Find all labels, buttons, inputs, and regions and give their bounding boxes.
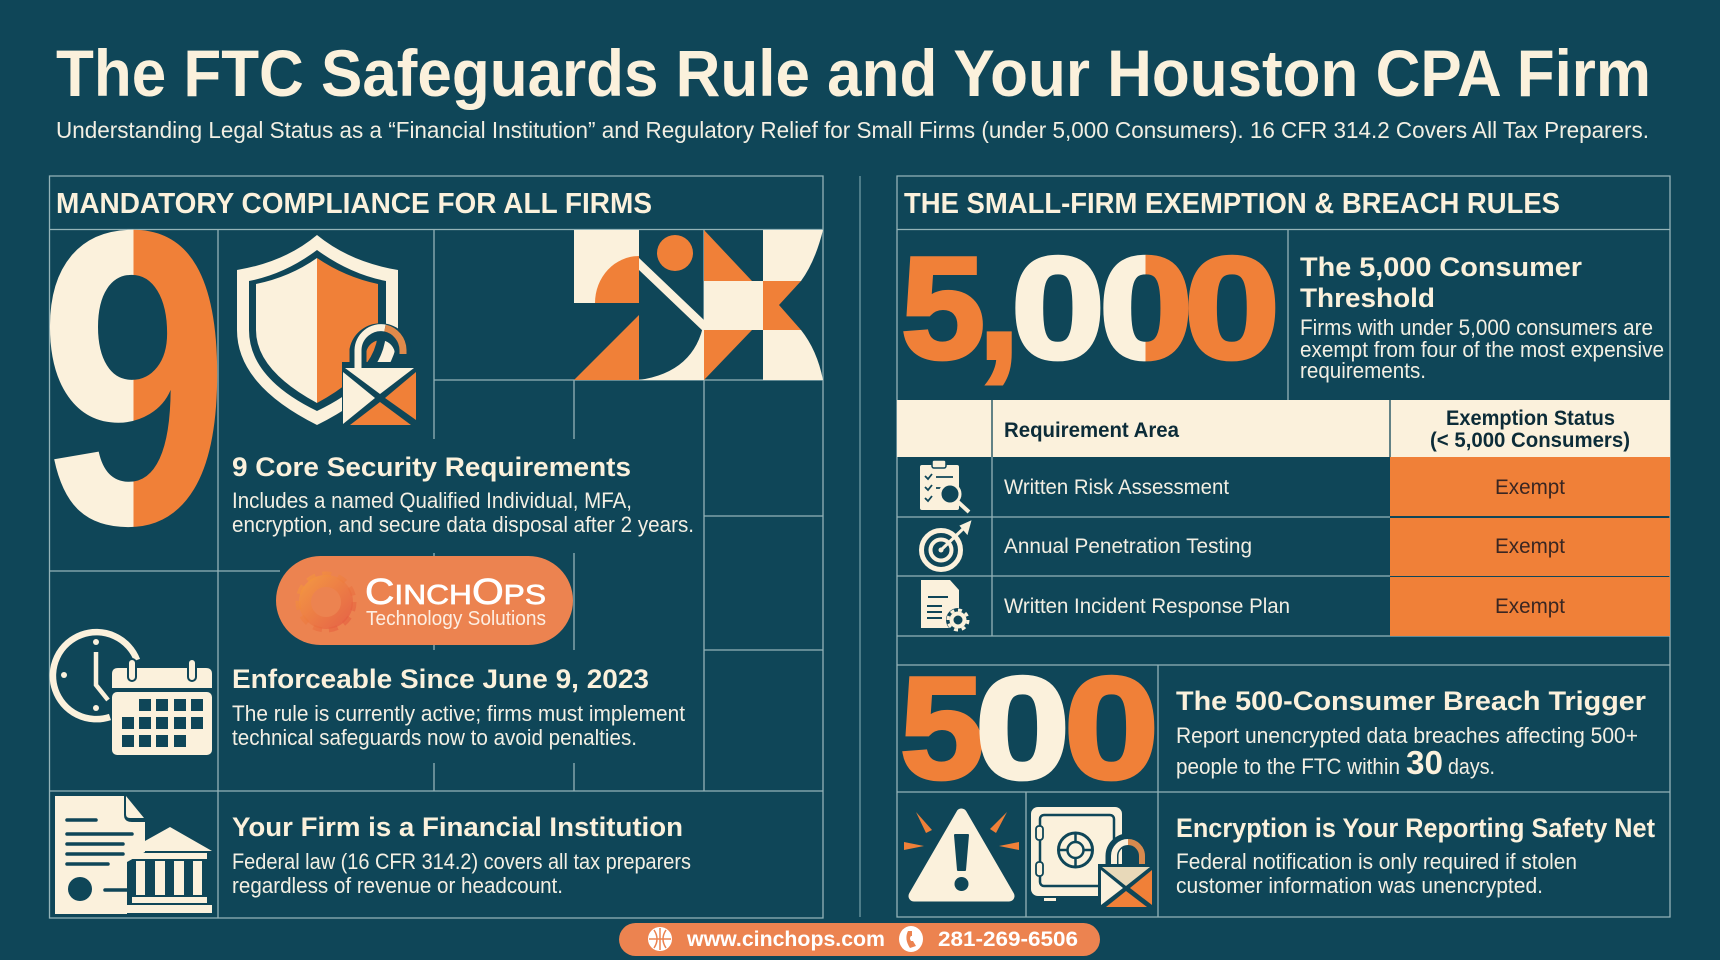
financial institution: regardless of revenue or headcount. [232,873,563,898]
enforceable since: Enforceable Since June 9, 2023 [232,664,649,694]
encryption safety net: Encryption is Your Reporting Safety Net [1176,813,1655,843]
footer contact pill [619,923,1100,956]
decorative geometric pattern [574,230,823,380]
subtitle: Understanding Legal Status as a “Financial Institution” and Regulatory Relief for Small Firms (under 5,000 Consumers). 16 CFR 314.2 Covers All Tax Preparers. [56,117,1649,143]
big number 5,000 [901,209,1280,393]
encryption safety net: customer information was unencrypted. [1176,873,1543,898]
panel: mandatory compliance [38,144,823,914]
table header: (< 5,000 Consumers) [1430,429,1630,452]
9 core security requirements: 9 Core Security Requirements [232,452,631,482]
500-consumer breach trigger: people to the FTC within [1176,754,1400,779]
5,000 consumer threshold text: Firms with under 5,000 consumers are [1300,315,1653,340]
financial institution: Your Firm is a Financial Institution [232,812,683,842]
9 core security requirements [232,452,694,537]
500-consumer breach trigger: Report unencrypted data breaches affecting 500+ [1176,723,1638,748]
icon: warning triangle [904,812,1019,896]
table header: Exemption Status [1446,407,1615,430]
big number 500: 0 [1064,647,1159,809]
enforceable since [232,664,685,750]
CinchOps logo pill: CINCH OPS [365,571,546,612]
500-consumer breach trigger [1176,686,1647,781]
panel heading: MANDATORY COMPLIANCE FOR ALL FIRMS [56,188,652,220]
financial institution [232,812,691,898]
panel: small-firm exemption and breach rules [897,188,1670,910]
500-consumer breach trigger: 30 [1406,744,1443,781]
500-consumer breach trigger: days. [1448,754,1495,779]
table header [897,400,1670,457]
big number 500 [900,647,1159,809]
5,000 consumer threshold text: exempt from four of the most expensive [1300,337,1664,362]
requirements table [897,400,1670,636]
table header: Requirement Area [1004,419,1179,442]
row: written risk assessment [920,457,1670,516]
enforceable since: technical safeguards now to avoid penalties. [232,725,637,750]
big number 5,000: 0 [1099,227,1193,389]
panel heading: THE SMALL-FIRM EXEMPTION & BREACH RULES [904,188,1560,220]
row: annual penetration testing [922,518,1670,576]
row: annual penetration testing: Exempt [1495,534,1565,558]
5,000 consumer threshold text: requirements. [1300,358,1426,383]
9 core security requirements: Includes a named Qualified Individual, MFA, [232,488,632,513]
row: written incident response plan: Exempt [1495,594,1565,618]
big number 5,000: 5 [901,227,985,389]
row: written risk assessment: Written Risk Assessment [1004,475,1229,499]
financial institution: Federal law (16 CFR 314.2) covers all tax preparers [232,849,691,874]
CinchOps logo pill: Technology Solutions [366,608,546,630]
big number 9: 9 [38,144,230,613]
title: The FTC Safeguards Rule and Your Houston CPA Firm [56,36,1651,110]
icon: safe with lock [1031,807,1155,910]
row: written incident response plan: Written Incident Response Plan [1004,594,1290,618]
phone number: 281-269-6506 [938,928,1078,951]
website: www.cinchops.com [686,928,885,951]
icon: clock and calendar [53,632,212,755]
big number 500: 0 [975,647,1070,809]
big number 5,000: 0 [1011,227,1105,389]
encryption safety net: Federal notification is only required if stolen [1176,849,1577,874]
CinchOps logo pill [276,556,573,645]
5,000 consumer threshold text [1300,252,1664,383]
enforceable since: The rule is currently active; firms must implement [232,701,685,726]
icon: globe [648,927,672,951]
9 core security requirements: encryption, and secure data disposal after 2 years. [232,512,694,537]
5,000 consumer threshold text: The 5,000 Consumer [1300,252,1583,282]
encryption safety net [1176,813,1655,898]
icon: shield with lock [237,235,418,425]
big number 500: 5 [900,647,984,809]
row: annual penetration testing: Annual Penetration Testing [1004,534,1252,558]
icon: document and bank [55,796,212,914]
500-consumer breach trigger: The 500-Consumer Breach Trigger [1176,686,1647,716]
big number 5,000: , [978,209,1020,393]
icon: phone [899,926,923,952]
big number 5,000: 0 [1184,227,1280,389]
row: written incident response plan [921,577,1670,636]
row: written risk assessment: Exempt [1495,475,1565,499]
5,000 consumer threshold text: Threshold [1300,283,1435,313]
